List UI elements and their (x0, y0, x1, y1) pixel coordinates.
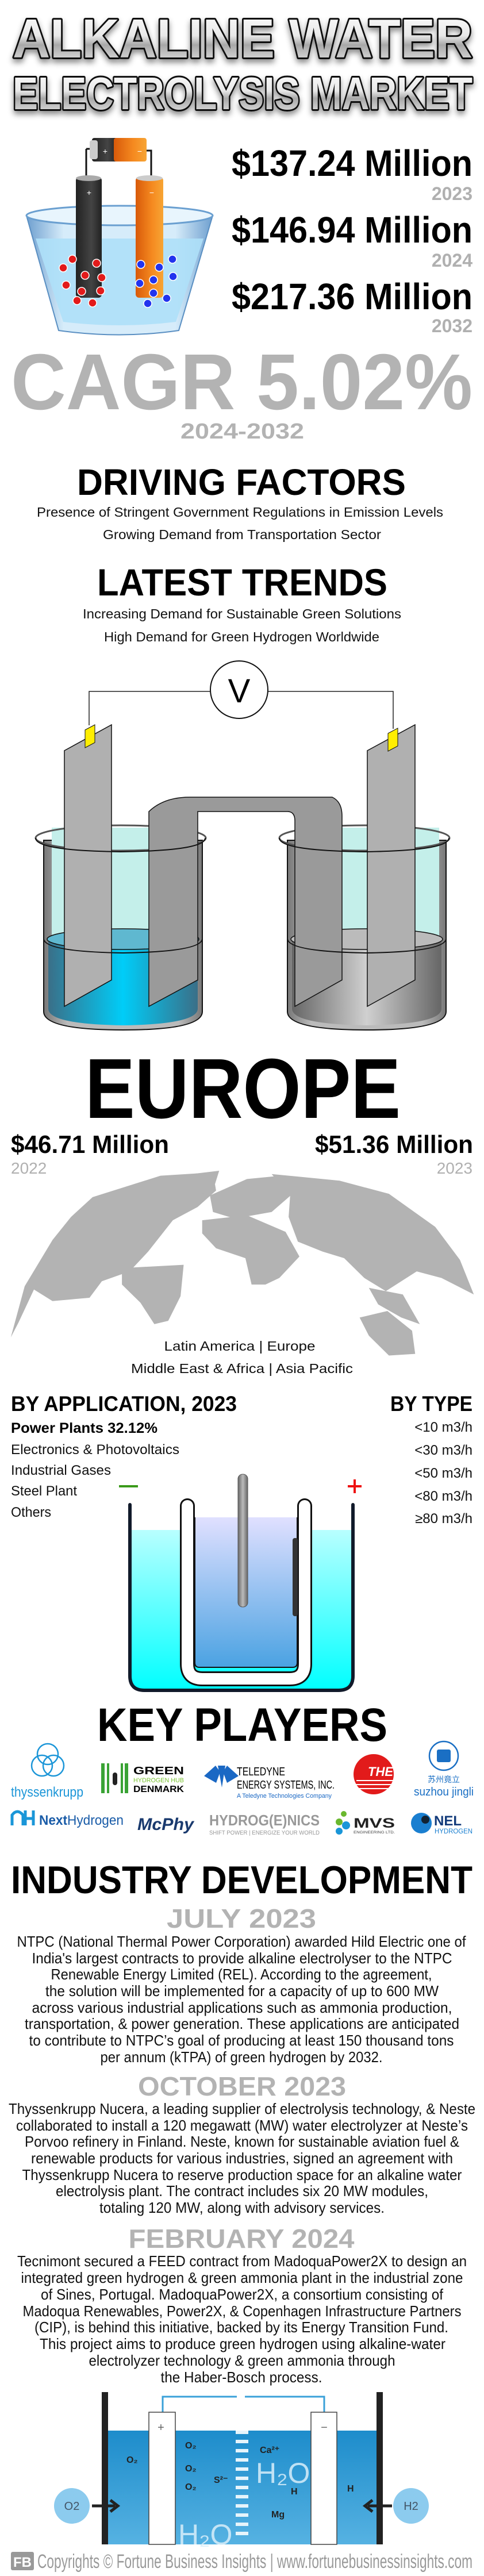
illustration: electrolyzer cell: Mg (271, 2510, 285, 2520)
latest trends: Increasing Demand for Sustainable Green Solutions (83, 606, 401, 621)
region list: Middle East & Africa | Asia Pacific (131, 1361, 353, 1376)
illustration: electrolyzer cell: O₂ (185, 2464, 197, 2474)
by type list: <30 m3/h (414, 1443, 473, 1458)
by type list: <80 m3/h (414, 1489, 473, 1504)
logos (11, 1741, 474, 1836)
region stat 2023 (315, 1131, 473, 1177)
icon: battery electrolysis beaker: + (87, 188, 91, 197)
development: October 2023: renewable products for various industries, signed an agreement with (31, 2150, 453, 2167)
logo: green hydrogen hub denmark: GREEN (133, 1765, 184, 1777)
development: October 2023: electrolysis plant. The contract includes six 20 MW modules, (56, 2182, 428, 2200)
illustration: electrolyzer cell (54, 2392, 429, 2551)
illustration: electrolyzer cell: H (291, 2487, 298, 2497)
icon: battery electrolysis beaker (26, 138, 213, 335)
driving factors (37, 462, 443, 542)
logo: teledyne (204, 1766, 335, 1800)
by application list: Others (11, 1505, 51, 1520)
by application list (11, 1392, 237, 1520)
stat: 2024 value: $146.94 Million (232, 209, 473, 251)
illustration: galvanic cell with voltmeter (36, 661, 450, 1030)
development: July 2023: across various industrial applications such as ammonia production, (32, 1999, 452, 2016)
latest trends: High Demand for Green Hydrogen Worldwide (104, 629, 379, 644)
logo: MVS (336, 1811, 395, 1835)
logo: Hydrogenics (209, 1812, 320, 1836)
development: July 2023: Renewable Energy Limited (REL). According to the agreement, (51, 1966, 432, 1983)
development: July 2023: to contribute to NTPC’s goal of producing at least 150 thousand tons (29, 2032, 454, 2049)
stat: 2032 value (232, 276, 473, 336)
world map (11, 1171, 474, 1355)
development: July 2023: JULY 2023 (167, 1904, 316, 1933)
driving factors: DRIVING FACTORS (77, 462, 406, 503)
driving factors: Presence of Stringent Government Regulations in Emission Levels (37, 505, 443, 520)
illustration: electrolyzer cell: Ca²⁺ (260, 2446, 279, 2455)
region stat 2023: $51.36 Million (315, 1131, 473, 1159)
by application list: Steel Plant (11, 1483, 77, 1499)
by application list: Electronics & Photovoltaics (11, 1442, 179, 1458)
development: July 2023: the solution will be implemented for a capacity of up to 600 MW (45, 1982, 439, 2000)
region stat 2023: 2023 (437, 1159, 473, 1177)
logo: THE (354, 1754, 394, 1794)
development: October 2023: Porvoo refinery in Finland. Neste, known for sustainable aviation fuel & (25, 2133, 459, 2150)
illustration: electrolyzer cell: H₂O (256, 2457, 310, 2489)
development: February 2024: integrated green hydrogen & green ammonia plant in the industrial zone (21, 2269, 463, 2286)
stat: 2023 value: $137.24 Million (232, 143, 473, 184)
latest trends (83, 561, 401, 644)
CAGR: 2024-2032 (180, 420, 304, 444)
footer: FB (13, 2555, 32, 2570)
development: February 2024: (CIP), is behind this initiative, backed by its Energy Transition Fund. (34, 2319, 448, 2336)
development: February 2024: of Sines, Portugal. MadoquaPower2X, a consortium consisting of (41, 2286, 444, 2303)
by type list (390, 1392, 473, 1527)
illustration: electrolysis tank (119, 1474, 362, 1690)
development: October 2023 (9, 2071, 475, 2216)
development: February 2024: the Haber-Bosch process. (161, 2369, 322, 2386)
latest trends: LATEST TRENDS (97, 561, 387, 603)
logo: NEL Hydrogen (411, 1813, 473, 1835)
stat: 2024 value: 2024 (432, 250, 473, 271)
illustration: electrolyzer cell: H (347, 2484, 354, 2494)
illustration: electrolyzer cell: O₂ (185, 2482, 197, 2492)
development: February 2024: electrolyzer technology & green ammonia through (89, 2352, 395, 2369)
region stat 2022: $46.71 Million (11, 1131, 169, 1159)
logo: Hydrogenics: HYDROG(E)NICS (209, 1812, 320, 1829)
stat: 2032 value: $217.36 Million (232, 276, 473, 317)
by type list: <50 m3/h (414, 1466, 473, 1481)
development: October 2023: totaling 120 MW, along with advisory services. (99, 2199, 385, 2216)
illustration: electrolyzer cell: − (321, 2421, 328, 2434)
region list (131, 1339, 353, 1376)
stat: 2023 value (232, 143, 473, 204)
logo: NEL Hydrogen: NEL (434, 1813, 462, 1829)
driving factors: Growing Demand from Transportation Sector (103, 527, 381, 542)
development: October 2023: OCTOBER 2023 (138, 2071, 346, 2101)
stat: 2023 value: 2023 (432, 183, 473, 204)
logo: MVS: MVS (354, 1816, 395, 1831)
logo: suzhou jingli: 苏州竟立 (428, 1775, 460, 1784)
stat: 2024 value (232, 209, 473, 271)
development: February 2024 (17, 2224, 467, 2386)
illustration: electrolyzer cell: O₂ (185, 2441, 197, 2451)
development: October 2023: Thyssenkrupp Nucera to reserve production space for an alkaline water (22, 2166, 462, 2183)
region stat 2022: 2022 (11, 1159, 47, 1177)
illustration: electrolyzer cell: O2 (64, 2500, 79, 2513)
logo: thyssenkrupp: thyssenkrupp (11, 1785, 83, 1800)
development: July 2023: per annum (kTPA) of green hydrogen by 2032. (100, 2048, 383, 2066)
by application list: Power Plants 32.12% (11, 1420, 158, 1436)
icon: battery electrolysis beaker: − (137, 147, 142, 156)
logo: green hydrogen hub denmark: DENMARK (133, 1785, 184, 1794)
development: February 2024: This project aims to produce green hydrogen using alkaline-water (40, 2335, 445, 2352)
logo: Hydrogenics: SHIFT POWER | ENERGIZE YOUR WORLD (209, 1830, 320, 1836)
development: July 2023: transportation, & power generation. These applications are anticipated (25, 2015, 459, 2032)
region stat 2022 (11, 1131, 169, 1177)
by type list: <10 m3/h (414, 1420, 473, 1435)
CAGR: CAGR 5.02% (11, 338, 473, 426)
illustration: electrolyzer cell: O₂ (126, 2455, 138, 2465)
logo: MVS: ENGINEERING LTD. (354, 1831, 395, 1835)
illustration: electrolyzer cell: S²⁻ (214, 2475, 228, 2485)
development: July 2023: India's largest contracts to provide alkaline electrolyser to the NTPC (32, 1950, 452, 1967)
by type list: BY TYPE (390, 1392, 473, 1416)
by type list: ≥80 m3/h (415, 1511, 473, 1527)
logo: green hydrogen hub denmark (101, 1763, 184, 1794)
illustration: electrolyzer cell: H₂O (178, 2519, 232, 2551)
logo: NextHydrogen (12, 1810, 124, 1828)
logo: McPhy: McPhy (137, 1815, 194, 1834)
region list: Latin America | Europe (164, 1339, 315, 1354)
icon: battery electrolysis beaker: − (149, 188, 154, 197)
logo: teledyne: A Teledyne Technologies Company (237, 1793, 332, 1800)
key players heading: KEY PLAYERS (97, 1699, 387, 1751)
illustration: galvanic cell with voltmeter: V (228, 672, 251, 710)
logo: green hydrogen hub denmark: HYDROGEN HUB (133, 1777, 184, 1784)
logo: suzhou jingli (414, 1741, 474, 1798)
logo: teledyne: ENERGY SYSTEMS, INC. (237, 1779, 335, 1791)
stat: 2032 value: 2032 (432, 316, 473, 336)
title (13, 8, 473, 119)
development: February 2024: FEBRUARY 2024 (129, 2224, 355, 2254)
by application list: Industrial Gases (11, 1463, 111, 1478)
illustration: electrolyzer cell: + (158, 2421, 164, 2434)
logo: thyssenkrupp (11, 1744, 83, 1800)
logo: teledyne: TELEDYNE (237, 1766, 285, 1778)
logo: NextHydrogen: NextHydrogen (39, 1813, 124, 1828)
by application list: BY APPLICATION, 2023 (11, 1392, 237, 1416)
logo: THE: THE (368, 1764, 394, 1779)
icon: battery electrolysis beaker: + (103, 147, 107, 156)
logo: suzhou jingli: suzhou jingli (414, 1786, 474, 1798)
region heading: Europe: EUROPE (85, 1041, 401, 1136)
logo: NEL Hydrogen: HYDROGEN (435, 1827, 473, 1835)
development: July 2023 (17, 1904, 466, 2066)
illustration: electrolyzer cell: H2 (404, 2500, 418, 2513)
